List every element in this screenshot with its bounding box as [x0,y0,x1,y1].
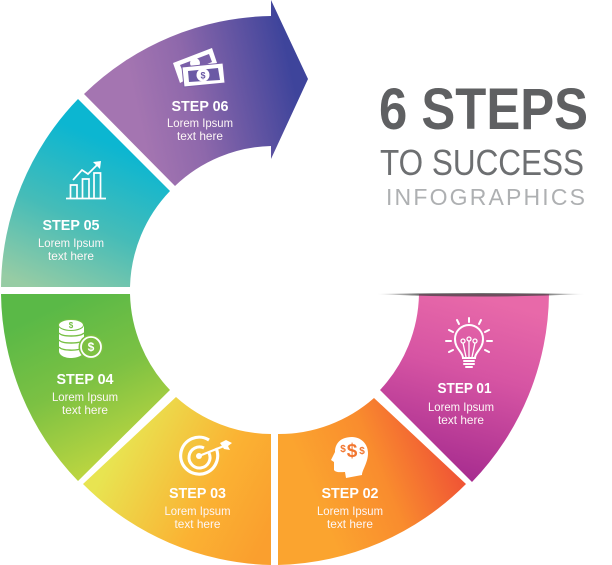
title block [379,77,588,210]
panel: step 04 [1,294,170,481]
icon: growth chart [66,161,106,198]
subtitle: to success: TO SUCCESS [380,142,584,183]
segment 05 [1,99,170,287]
subtitle: infographics: INFOGRAPHICS [386,184,585,210]
label: step 05: Lorem Ipsum [38,236,104,250]
segment 01 [380,294,549,482]
segment 03 [83,397,271,565]
label: step 01: Lorem Ipsum [428,400,494,414]
title: 6 steps: 6 STEPS [379,77,588,142]
label: step 03: text here [174,517,221,531]
label: step 03: STEP 03 [169,485,226,502]
icon: head with dollars: $ [347,441,358,462]
icon: coin stack [58,320,104,360]
label: step 03 [164,485,230,531]
label: step 02: STEP 02 [322,485,378,502]
label: step 05: STEP 05 [42,217,100,234]
icon: head with dollars: $ [359,446,365,457]
label: step 03: Lorem Ipsum [164,504,230,518]
panel: step 02 [278,398,466,565]
label: step 01 [428,380,494,427]
segment 04 [1,294,170,481]
icon: banknotes [173,48,225,87]
icon: banknotes: $ [200,70,206,80]
label: step 05: text here [48,249,94,263]
label: step 06 [167,98,233,143]
fold shadow [376,293,586,296]
segment 06 [84,0,308,186]
panel: step 03 [83,397,271,565]
label: step 04: Lorem Ipsum [52,390,118,404]
label: step 01: text here [438,413,484,427]
panel: step 06 arrow [84,0,308,186]
label: step 06: STEP 06 [172,98,228,115]
label: step 06: Lorem Ipsum [167,116,233,130]
icon: head with dollars [331,437,368,478]
label: step 02: text here [327,517,373,531]
icon: light bulb [446,318,492,367]
icon: target with arrow [181,437,232,474]
label: step 01: STEP 01 [438,380,492,397]
label: step 04: STEP 04 [56,371,114,388]
label: step 02 [317,485,383,531]
panel: step 01 [376,293,586,482]
label: step 04 [52,371,118,417]
label: step 06: text here [177,129,223,143]
icon: coin stack: $ [69,321,74,330]
label: step 04: text here [62,403,108,417]
panel: step 05 [1,99,170,287]
label: step 05 [38,217,104,263]
icon: coin stack: $ [88,340,95,354]
icon: head with dollars: $ [340,444,346,455]
label: step 02: Lorem Ipsum [317,504,383,518]
segment 02 [278,398,466,565]
